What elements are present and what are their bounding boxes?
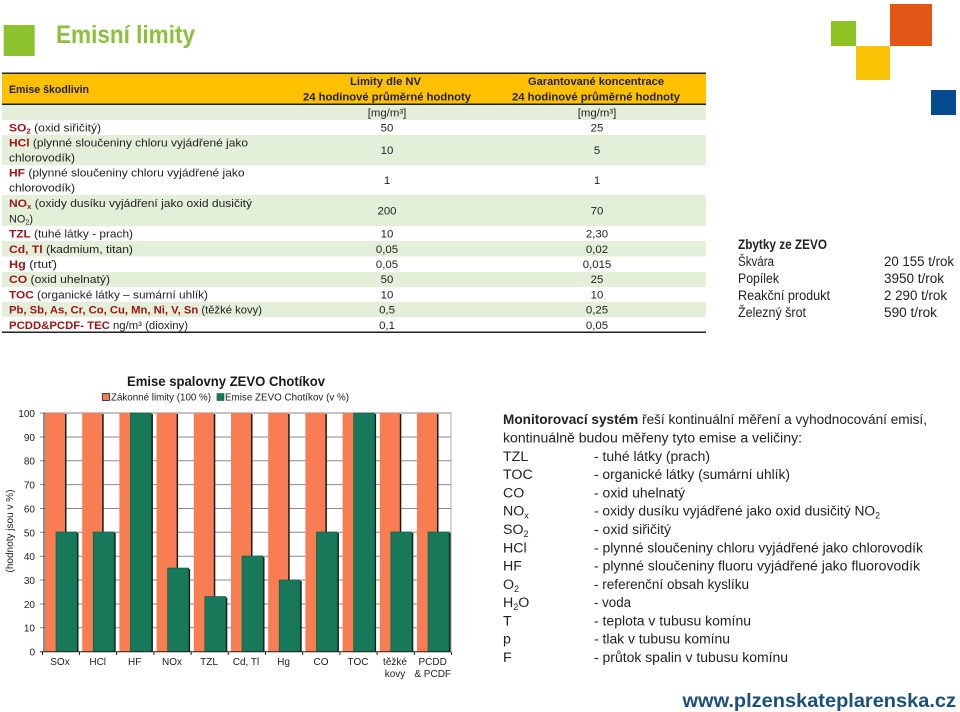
table row: HF: HF (plynné sloučeniny chloru vyjádřené jako	[9, 167, 245, 179]
item: TZL	[503, 449, 710, 465]
x axis labels: těžké	[383, 657, 407, 668]
table row: Cd, Tl: Cd, Tl (kadmium, titan)	[9, 244, 133, 256]
item: O2: O	[503, 577, 514, 593]
table row: CO: 25	[591, 274, 603, 286]
panel: residues from ZEVO	[738, 237, 954, 320]
table row: Hg	[9, 259, 611, 271]
bars: NOx	[157, 413, 190, 652]
table row: TZL: TZL (tuhé látky - prach)	[9, 229, 133, 241]
website URL: www.plzenskateplarenska.cz	[681, 690, 956, 712]
chart title: Emise spalovny ZEVO Chotíkov	[127, 374, 325, 390]
residue: reaction product: Reakční produkt	[738, 288, 830, 303]
bars: SOx	[45, 413, 78, 652]
table row: TZL: 10	[381, 229, 393, 241]
table row: NOx	[2, 195, 706, 226]
item: NOx: 2	[875, 511, 880, 521]
residue: ash: 3950 t/rok	[884, 271, 944, 286]
x axis labels: NOx	[162, 657, 182, 668]
x axis labels: PCDD	[419, 657, 447, 668]
bars: Cd, Tl	[231, 413, 264, 652]
plot grid	[40, 413, 451, 652]
table row: SO2: 2	[26, 126, 31, 135]
table row: NOx: (oxidy dusíku vyjádření jako oxid dusičitý	[31, 198, 252, 210]
bars: HCl	[82, 413, 116, 652]
x axis labels: Hg	[277, 657, 290, 668]
table header row: Garantované koncentrace	[528, 76, 664, 88]
x axis labels: TZL	[200, 657, 218, 668]
table row: Cd, Tl: 0,02	[586, 244, 608, 256]
bars: heavy metals	[380, 413, 413, 652]
item: NOx: - oxidy dusíku vyjádřené jako oxid dusičitý NO	[594, 504, 883, 520]
item: H2O: 2	[513, 602, 518, 612]
x axis labels: Cd, Tl	[233, 657, 259, 668]
item: H2O: - voda	[594, 595, 631, 611]
item: CO: - oxid uhelnatý	[594, 486, 686, 502]
table row: TOC: 10	[591, 290, 603, 302]
icon: green title square	[4, 25, 35, 56]
table row: NOx: NO	[9, 198, 32, 211]
table row: CO: 50	[381, 274, 393, 286]
monitoring intro: kontinuálně budou měřeny tyto emise a veličiny:	[503, 430, 802, 446]
y axis labels: 60	[24, 504, 35, 516]
table row: heavy metals: 0,5	[379, 304, 395, 316]
bars: Hg	[268, 413, 302, 652]
item: HF: - plynné sloučeniny fluoru vyjádřené jako fluorovodík	[594, 559, 921, 575]
item: F: F	[503, 650, 512, 666]
table row: heavy metals: 0,25	[586, 304, 608, 316]
item: F	[503, 650, 788, 666]
bars: TZL	[194, 413, 227, 652]
item: T	[503, 614, 751, 630]
table row: HF: chlorovodík)	[9, 182, 75, 194]
x axis labels: CO	[314, 657, 329, 668]
item: TOC: - organické látky (sumární uhlík)	[594, 467, 790, 483]
item: SO2: SO	[503, 522, 524, 538]
y axis labels: 70	[24, 481, 35, 492]
table row: HCl: chlorovodík)	[9, 152, 75, 164]
table row: heavy metals: Pb, Sb, As, Cr, Co, Cu, Mn, Ni, V, Sn (těžké kovy)	[9, 304, 262, 316]
table row: Cd, Tl: 0,05	[376, 244, 398, 256]
table row: NOx: 200	[377, 206, 397, 218]
item: HF: HF	[503, 559, 522, 575]
residue: slag	[738, 254, 954, 269]
chart legend	[102, 392, 349, 404]
residue: ash: Popílek	[738, 271, 779, 286]
item: T: T	[503, 614, 512, 630]
monitoring intro	[503, 412, 927, 446]
item: H2O	[503, 595, 631, 612]
item: NOx: NO	[503, 504, 524, 520]
table row: heavy metals	[2, 302, 706, 317]
table row: Hg: 0,015	[583, 259, 611, 271]
y axis labels: 90	[24, 433, 35, 444]
item: CO: CO	[503, 486, 524, 502]
y axis labels: 30	[24, 576, 35, 587]
table row: TOC: TOC (organické látky – sumární uhlík)	[9, 290, 208, 302]
table row: dioxins: 0,1	[379, 320, 395, 332]
residue: iron scrap: Železný šrot	[738, 305, 806, 320]
y axis labels: 80	[24, 457, 35, 468]
item: TOC	[503, 467, 790, 483]
y axis labels: 20	[24, 600, 35, 611]
table row: HF: 1	[384, 175, 390, 187]
y axis title: (hodnoty jsou v %)	[5, 490, 16, 572]
table row: TZL	[9, 229, 608, 241]
item: H2O: H	[503, 595, 513, 611]
x axis labels: kovy	[385, 669, 405, 680]
residue: ash	[738, 271, 944, 286]
y axis labels: 40	[24, 552, 35, 563]
table row: TOC: 10	[381, 290, 393, 302]
table row: SO2: (oxid siřičitý)	[31, 122, 101, 134]
table row: TOC	[9, 290, 603, 302]
table row: HCl: 5	[594, 145, 600, 157]
panel: emissions bar chart	[5, 374, 452, 680]
table row: CO: CO (oxid uhelnatý)	[9, 274, 110, 286]
table row: Hg: 0,05	[376, 259, 398, 271]
item: O2	[503, 577, 749, 594]
residue: slag: Škvára	[738, 254, 774, 269]
item: NOx: x	[524, 511, 529, 521]
item: HCl: - plynné sloučeniny chloru vyjádřené jako chlorovodík	[594, 540, 924, 556]
table row: SO2: 25	[591, 122, 603, 134]
table header row	[2, 72, 706, 105]
item: SO2: - oxid siřičitý	[594, 522, 672, 538]
table header row: 24 hodinové průměrné hodnoty	[512, 92, 681, 104]
table row: units: [mg/m³]	[368, 108, 406, 120]
item: TZL: TZL	[503, 449, 528, 465]
table header row: 24 hodinové průměrné hodnoty	[303, 92, 472, 104]
panel: monitoring system text	[503, 412, 927, 666]
x axis labels: & PCDF	[414, 669, 451, 680]
table row: dioxins	[2, 320, 706, 333]
y axis labels: 100	[18, 409, 35, 420]
item: p: - tlak v tubusu komínu	[594, 632, 730, 648]
table row: HCl: HCl (plynné sloučeniny chloru vyjádřené jako	[9, 137, 248, 149]
table header row: Limity dle NV	[350, 76, 421, 88]
x axis labels: TOC	[348, 657, 368, 668]
table row: HCl: 10	[381, 145, 393, 157]
table row: SO2	[9, 122, 603, 135]
residues heading: Zbytky ze ZEVO	[738, 237, 827, 252]
item: TOC: TOC	[503, 467, 533, 483]
table row: NOx: 70	[591, 206, 603, 218]
x axis labels	[50, 657, 451, 680]
item: CO	[503, 486, 686, 502]
title: Emisní limity	[56, 21, 195, 49]
item: SO2	[503, 522, 672, 539]
bars: HF	[119, 413, 153, 652]
residue: iron scrap	[738, 305, 937, 320]
item: p	[503, 632, 730, 648]
chart axes	[40, 413, 452, 655]
table row: NOx: x	[27, 202, 32, 211]
item: H2O: O	[518, 595, 529, 611]
item: HCl: HCl	[503, 540, 527, 556]
bars: PCDD & PCDF	[417, 413, 450, 652]
table row: NOx: NO	[9, 214, 26, 226]
item: TZL: - tuhé látky (prach)	[594, 449, 710, 465]
panel: emission limits table	[2, 72, 706, 333]
bars: TOC	[343, 413, 376, 652]
table row: units	[2, 105, 706, 120]
table row: NOx: )	[29, 214, 33, 226]
item: p: p	[503, 632, 511, 648]
table row: Hg: Hg (rtuť)	[9, 259, 57, 271]
table row: dioxins: PCDD&PCDF- TEC ng/m³ (dioxiny)	[9, 320, 188, 332]
y axis labels: 10	[24, 624, 35, 635]
item: O2: - referenční obsah kyslíku	[594, 577, 749, 593]
item: F: - průtok spalin v tubusu komínu	[594, 650, 788, 666]
table row: SO2: SO	[9, 122, 31, 135]
monitoring intro: Monitorovací systém řeší kontinuální měření a vyhodnocování emisí,	[503, 412, 927, 428]
table row: CO	[2, 272, 706, 287]
table row: NOx: 2	[25, 218, 29, 226]
chart legend: Zákonné limity (100 %)	[111, 392, 211, 404]
residue: reaction product	[738, 288, 947, 303]
x axis labels: HF	[128, 657, 141, 668]
table row: Cd, Tl	[2, 241, 706, 256]
table row: TZL: 2,30	[586, 229, 608, 241]
residue: reaction product: 2 290 t/rok	[884, 288, 947, 303]
item: O2: 2	[514, 584, 519, 594]
table row: HF: 1	[594, 175, 600, 187]
table row: units: [mg/m³]	[578, 108, 616, 120]
x axis labels: HCl	[89, 657, 106, 668]
table row: HCl	[2, 135, 706, 165]
chart legend: Emise ZEVO Chotíkov (v %)	[225, 392, 349, 404]
bars: CO	[305, 413, 339, 652]
item: SO2: 2	[524, 529, 529, 539]
y axis labels	[18, 409, 35, 658]
table header row: Emise škodlivin	[9, 84, 89, 96]
table row: dioxins: 0,05	[586, 320, 608, 332]
residue: iron scrap: 590 t/rok	[884, 305, 937, 320]
x axis labels: SOx	[50, 657, 70, 668]
table row: HF	[9, 167, 600, 194]
logo squares	[831, 4, 956, 115]
y axis labels: 50	[24, 528, 35, 539]
item: T: - teplota v tubusu komínu	[594, 614, 751, 630]
residue: slag: 20 155 t/rok	[884, 254, 954, 269]
y axis labels: 0	[29, 648, 35, 658]
table row: SO2: 50	[381, 122, 393, 134]
